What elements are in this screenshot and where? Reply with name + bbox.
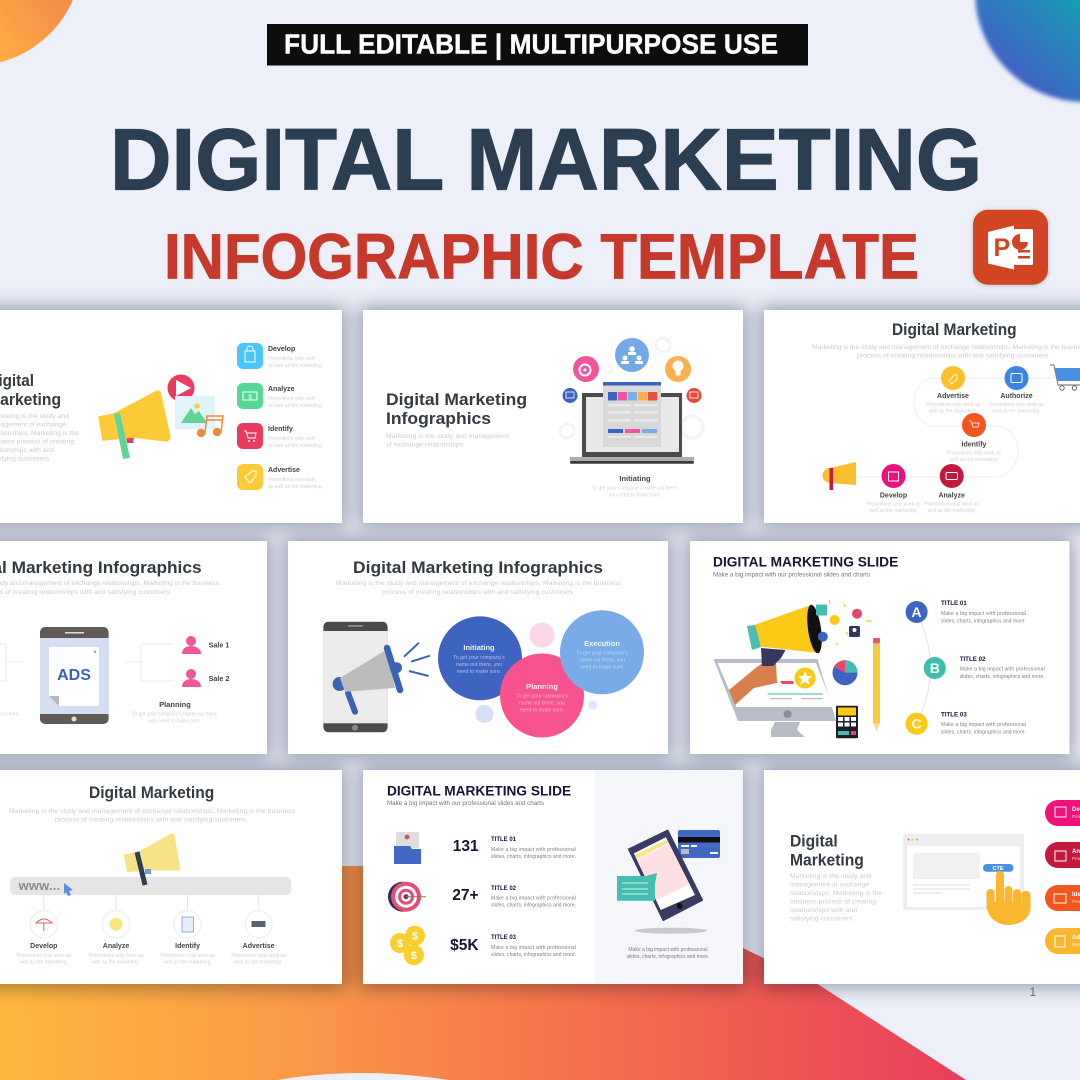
body text: process of creating relationships with and satisfying customers. — [382, 589, 575, 596]
tablet with ads: ADS — [57, 667, 91, 684]
button: cte: CTE — [992, 866, 1004, 872]
step: identify: Promotions only work as — [160, 953, 215, 959]
item text 3: TITLE 03 — [491, 935, 517, 941]
decorative orange corner circle — [0, 0, 82, 66]
step: advertise: well as the marketing. — [234, 960, 283, 966]
item B: B — [930, 660, 940, 676]
circle: planning: To get your company's — [516, 694, 568, 700]
item text 1 — [491, 837, 576, 860]
item A: Make a big impact with professional — [941, 611, 1026, 617]
step: identify: Promotions only work as — [947, 450, 1002, 456]
list item: analyze: Promotions only work — [268, 396, 316, 402]
body text: Marketing is the study and management of exchange relationships. Marketing is the business — [812, 344, 1080, 351]
body text: of exchange relationships. — [386, 442, 465, 449]
connecting arc — [921, 622, 930, 714]
caption: To get your company's name out there, — [592, 486, 678, 492]
icon: picture and music note — [175, 396, 223, 437]
icon: coins — [390, 926, 425, 965]
megaphone — [333, 643, 430, 712]
item text 3: Make a big impact with professional — [491, 945, 576, 951]
item text 1: TITLE 01 — [491, 837, 517, 843]
planning caption: you need to make sure. — [149, 718, 201, 724]
item text 1: Make a big impact with professional — [491, 847, 576, 853]
list item: develop: as well as the marketing. — [268, 363, 323, 369]
icon: megaphone — [99, 391, 170, 459]
icon: coins: $ — [412, 931, 418, 943]
icon: target circle — [573, 356, 599, 382]
step: develop: well as the marketing. — [20, 960, 68, 966]
body text — [386, 433, 509, 449]
step: authorize: Authorize — [1000, 393, 1033, 400]
step: analyze: well as the marketing. — [92, 960, 140, 966]
item C: C — [912, 716, 922, 732]
icon: powerpoint — [973, 210, 1048, 285]
caption — [627, 947, 709, 960]
social icons — [816, 600, 872, 645]
step: develop: Promotions only work as — [866, 502, 921, 508]
planning caption: To get your company's name out there, — [132, 712, 218, 718]
list item: analyze: $ — [248, 395, 252, 401]
monitor — [713, 659, 836, 737]
item C: Make a big impact with professional — [941, 722, 1026, 728]
search bar: www... — [18, 878, 60, 893]
step: analyze: Promotions only work as — [924, 502, 979, 508]
icon: shopping cart — [1050, 365, 1080, 390]
panel: slide 2 laptop — [363, 310, 743, 523]
step: develop: Develop — [30, 943, 57, 950]
step: identify: well as the marketing. — [163, 960, 212, 966]
button: cte — [983, 864, 1014, 872]
item A: TITLE 01 — [941, 600, 967, 607]
tablet with ads — [40, 627, 109, 724]
body text: satisfying customers. — [790, 916, 854, 923]
sale labels: Sale 1 — [209, 640, 229, 650]
circle: initiating: name out there, you — [456, 662, 502, 668]
icon: target — [388, 882, 426, 912]
panel: slide 4 ads tablet — [0, 541, 267, 754]
heading: DIGITAL MARKETING SLIDE — [713, 554, 898, 570]
step: identify: well as the marketing. — [950, 457, 998, 463]
circle: initiating: Initiating — [463, 643, 495, 652]
circle: planning — [500, 654, 584, 738]
calculator — [836, 706, 858, 738]
step: advertise — [231, 911, 286, 966]
body text: process of creating relationships with and satisfying customers. — [55, 816, 248, 823]
panel: slide 3 path — [764, 310, 1080, 523]
item text 2 — [491, 886, 576, 908]
list item: identify: Identify — [268, 426, 293, 433]
step: develop — [866, 464, 921, 514]
step: advertise: Advertise — [937, 393, 969, 400]
icon: person sale 1 — [182, 636, 201, 654]
list item: identify: Promotions only work — [268, 436, 316, 442]
icon: powerpoint: P — [994, 234, 1010, 262]
panel: slide 5 circles — [288, 541, 668, 754]
body text: Marketing is the study and management of exchange relationships. Marketing is the business — [9, 808, 296, 815]
connector lines — [0, 644, 174, 681]
decorative small blue dot — [588, 700, 597, 710]
heading: Digital Marketing — [89, 783, 214, 802]
step: authorize: well as the marketing. — [992, 408, 1041, 414]
item B — [924, 656, 1045, 680]
list item: advertise — [237, 464, 323, 490]
item text 1: slides, charts, infographics and more. — [491, 854, 576, 860]
step: develop — [17, 911, 72, 966]
panel: slide 6 megaphone monitor — [690, 541, 1070, 754]
step: advertise: Promotions only work as — [926, 402, 981, 408]
page number: 1 — [1030, 985, 1036, 999]
browser window — [903, 834, 1024, 910]
icon: person sale 2 — [182, 669, 201, 687]
heading — [0, 371, 61, 409]
stems — [44, 895, 259, 911]
circle: planning: name out there, you — [519, 700, 565, 706]
step: analyze: Analyze — [103, 943, 129, 950]
panel: slide 8 stats — [363, 770, 743, 984]
step: identify — [160, 911, 215, 966]
body text — [9, 808, 296, 823]
large megaphone — [747, 604, 824, 666]
item B: TITLE 02 — [960, 656, 986, 663]
item C: TITLE 03 — [941, 712, 967, 719]
body text — [336, 580, 622, 596]
body text: relationships with and — [790, 907, 857, 914]
planning caption — [0, 700, 218, 724]
heading: Digital Marketing — [386, 389, 527, 409]
circle: execution: need to make sure. — [580, 664, 624, 670]
item B: slides, charts, infographics and more. — [960, 674, 1045, 680]
pie chart — [832, 660, 858, 685]
step: advertise: Promotions only work as — [231, 953, 286, 959]
stat: 131: 131 — [453, 838, 479, 855]
heading — [790, 832, 864, 870]
step: authorize: Promotions only work as — [989, 402, 1044, 408]
icon: coins: $ — [397, 938, 403, 950]
circle: execution: Execution — [584, 639, 620, 648]
list item: develop — [237, 343, 323, 369]
list item: advertise: as well as the marketing. — [268, 484, 323, 490]
list item: analyze: as well as the marketing. — [268, 403, 323, 409]
step: analyze: Promotions only work as — [89, 953, 144, 959]
pill: advertise — [1045, 928, 1080, 954]
stat: 27+: 27+ — [452, 887, 479, 904]
item A: slides, charts, infographics and more. — [941, 618, 1026, 624]
item A: A — [912, 604, 922, 620]
panel: slide 7 search bar — [0, 770, 342, 984]
heading: Infographics — [386, 408, 491, 428]
decorative gears — [560, 338, 703, 438]
bottom gradient wave — [0, 866, 966, 1080]
icon: play button — [168, 374, 194, 402]
step: advertise: well as the marketing. — [929, 408, 977, 414]
icon: chat bubble — [617, 873, 657, 901]
circle: planning: need to make sure. — [520, 708, 564, 714]
caption: you need to make sure. — [609, 492, 661, 498]
main title: DIGITAL MARKETING — [110, 112, 982, 209]
body text — [0, 580, 220, 596]
item text 3 — [491, 935, 576, 958]
circle: execution: name out there, you — [579, 658, 625, 664]
phone shadow — [635, 928, 707, 934]
decorative blue corner circle — [975, 0, 1080, 102]
browser window — [603, 382, 661, 447]
body text: Marketing is the study and management of exchange relationships. Marketing is the business — [336, 580, 622, 587]
body text — [0, 413, 79, 462]
circle: execution — [560, 610, 644, 694]
list item: develop: Develop — [268, 346, 295, 353]
caption: slides, charts, infographics and more. — [627, 954, 709, 960]
laptop — [570, 393, 694, 464]
icon: megaphone — [823, 462, 856, 490]
decorative pale blue dot — [476, 705, 494, 723]
circle: execution: To get your company's — [576, 650, 628, 656]
icon: credit card — [678, 830, 720, 858]
circle: planning: Planning — [526, 682, 558, 691]
sale labels: Sale 2 — [209, 674, 229, 683]
pill: develop — [1045, 800, 1080, 826]
item text 2: Make a big impact with professional — [491, 896, 576, 902]
icon: coins: $ — [411, 950, 417, 962]
icon: blue chart badge — [562, 388, 578, 403]
icon: hand — [986, 871, 1030, 925]
icon: team circle — [615, 338, 649, 372]
step: advertise — [926, 366, 981, 414]
item text 3: slides, charts, infographics and more. — [491, 952, 576, 958]
stat: $5K: $5K — [450, 937, 479, 954]
step: develop: Develop — [880, 492, 907, 500]
list item: develop: Promotions only work — [268, 356, 316, 362]
body text: Marketing is the study and management — [386, 433, 509, 440]
pill: identify — [1045, 885, 1080, 911]
list item: identify — [237, 423, 323, 449]
panel: slide 1 megaphone list — [0, 310, 342, 523]
step: identify: Identify — [962, 442, 987, 448]
heading: DIGITAL MARKETING SLIDE — [387, 783, 571, 799]
planning caption: Planning — [159, 700, 191, 709]
step: identify: Identify — [175, 943, 200, 950]
icon: red chart badge — [686, 388, 702, 403]
step: analyze: well as the marketing. — [928, 508, 976, 514]
list item: identify: as well as the marketing. — [268, 443, 323, 449]
icon: phone — [629, 831, 702, 920]
circle: initiating: need to make sure. — [457, 669, 501, 675]
subheading: Make a big impact with our professional slides and charts — [713, 572, 870, 578]
icon: bulb circle — [665, 356, 691, 382]
item B: Make a big impact with professional — [960, 666, 1045, 672]
item text 2: TITLE 02 — [491, 886, 517, 892]
body text: management of exchange — [790, 882, 869, 888]
caption — [592, 474, 678, 498]
item C: slides, charts, infographics and more. — [941, 730, 1026, 736]
list item: analyze — [237, 383, 323, 409]
subtitle: INFOGRAPHIC TEMPLATE — [164, 222, 919, 293]
path line — [855, 378, 1055, 477]
heading: Digital Marketing Infographics — [353, 557, 603, 577]
heading: Digital — [790, 832, 838, 851]
subheading: Make a big impact with our professional slides and charts — [387, 800, 544, 807]
body text — [812, 344, 1080, 360]
heading: Marketing — [790, 851, 864, 870]
search bar — [10, 877, 291, 896]
banner: FULL EDITABLE | MULTIPURPOSE USE — [284, 28, 778, 60]
body text: relationships. Marketing is the — [790, 890, 882, 897]
body text: business process of creating — [790, 899, 876, 906]
sale labels — [209, 640, 229, 683]
body text: Marketing is the study and — [790, 873, 871, 880]
slide shadows — [0, 306, 1080, 988]
megaphone — [124, 834, 180, 885]
panel: slide 9 click-through — [764, 770, 1080, 984]
item text 2: slides, charts, infographics and more. — [491, 902, 576, 908]
heading — [386, 389, 527, 428]
step: analyze: Analyze — [938, 492, 965, 500]
tablet with ads: × — [93, 650, 97, 656]
list item: advertise: Promotions only work — [268, 477, 316, 483]
step: analyze — [924, 464, 979, 514]
phone — [323, 622, 388, 732]
icon: folder — [394, 832, 421, 864]
circle: initiating — [438, 616, 522, 700]
step: develop: well as the marketing. — [869, 508, 918, 514]
item A — [906, 600, 1026, 624]
bottom pale arc — [272, 1073, 455, 1080]
body text — [790, 873, 882, 923]
item C — [906, 712, 1026, 736]
arm — [729, 662, 777, 705]
decorative pale pink dot — [530, 622, 554, 648]
right shaded column — [595, 770, 743, 984]
step: authorize — [989, 366, 1044, 414]
step: advertise: Advertise — [243, 943, 275, 950]
step: develop: Promotions only work as — [17, 953, 72, 959]
heading: Digital Marketing — [892, 320, 1017, 339]
caption: Initiating — [619, 474, 651, 483]
circle: initiating: To get your company's — [453, 655, 505, 661]
caption: Make a big impact with professional — [628, 947, 708, 953]
step: analyze — [89, 911, 144, 966]
pencil — [873, 638, 880, 731]
list item: advertise: Advertise — [268, 467, 300, 474]
body text: process of creating relationships with and satisfying customers. — [857, 352, 1050, 360]
step: identify — [947, 413, 1002, 463]
list item: analyze: Analyze — [268, 386, 295, 393]
pill: analyze — [1045, 842, 1080, 868]
